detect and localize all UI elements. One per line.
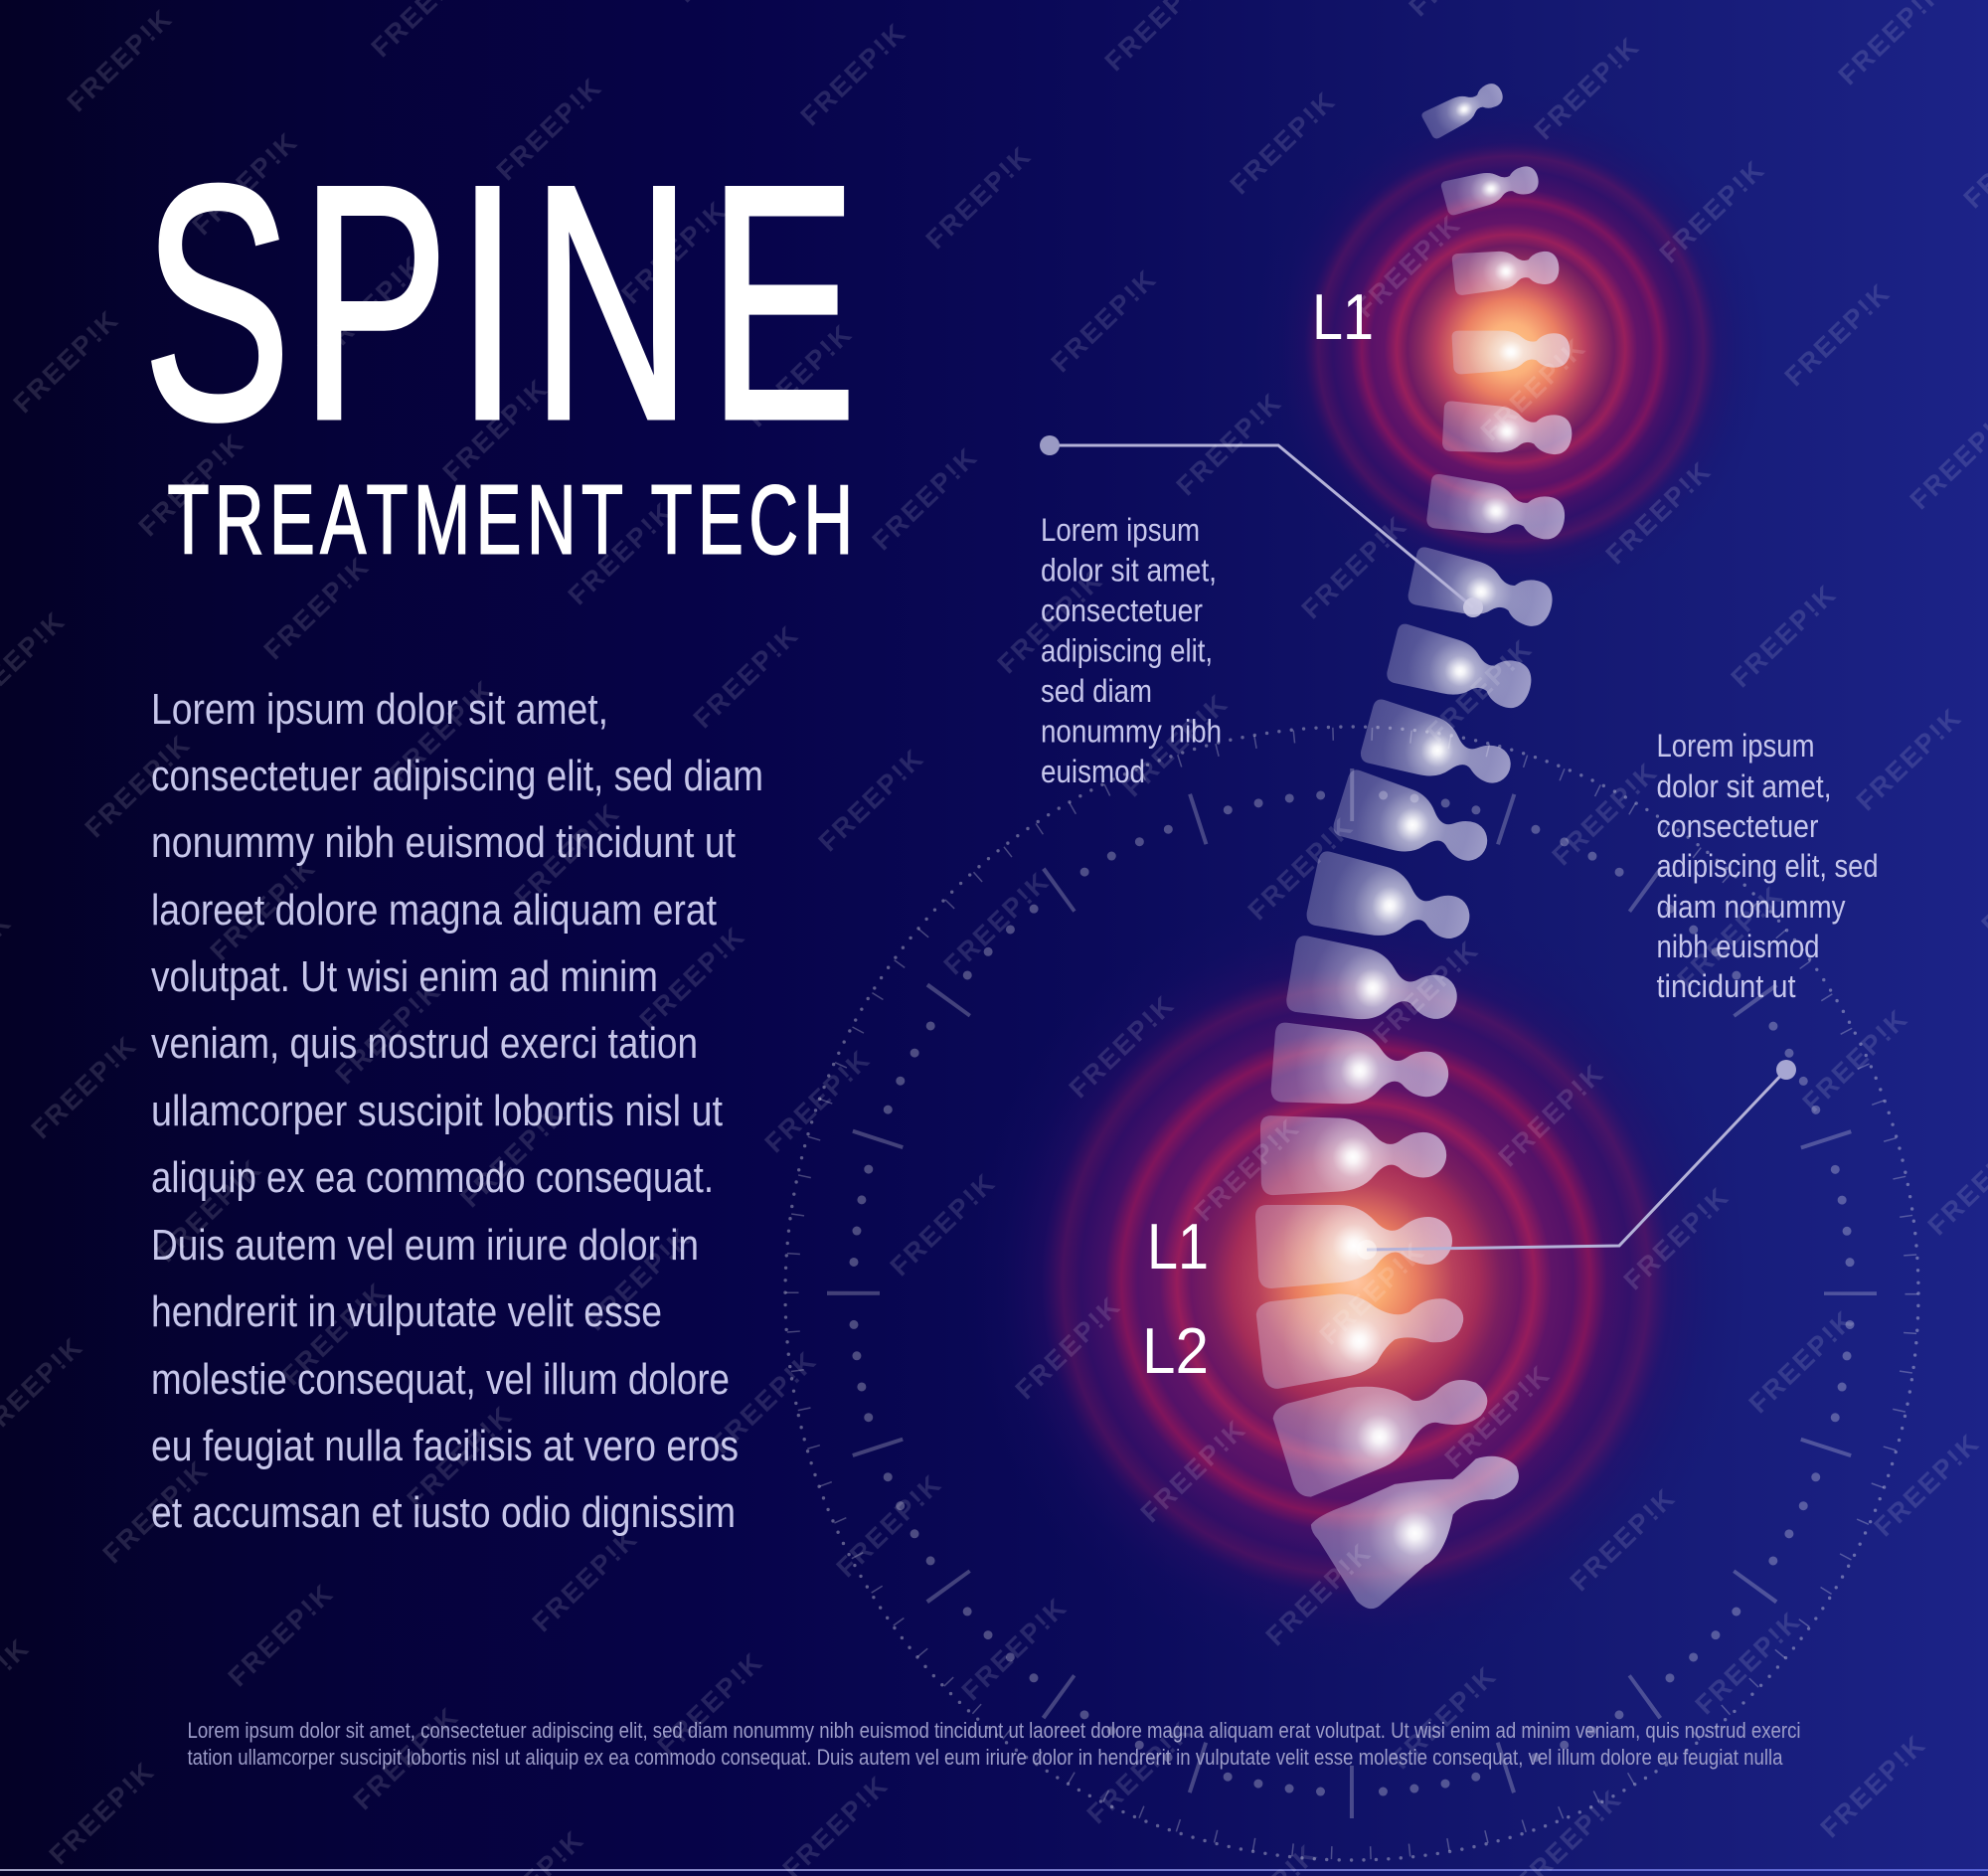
watermarks: FREEP!K: [312, 250, 429, 364]
main paragraph: et accumsan et iusto odio dignissim: [151, 1489, 736, 1537]
watermarks: FREEP!K: [1690, 1606, 1807, 1720]
watermarks: FREEP!K: [26, 1030, 143, 1144]
main paragraph: hendrerit in vulputate velit esse: [151, 1288, 662, 1336]
watermarks: FREEP!K: [1475, 332, 1592, 446]
watermarks: FREEP!K: [1242, 811, 1360, 926]
watermarks: FREEP!K: [813, 743, 930, 857]
watermarks: FREEP!K: [151, 1153, 268, 1268]
vertebra labels: [1142, 280, 1374, 1387]
watermarks: FREEP!K: [616, 195, 734, 309]
watermarks: FREEP!K: [44, 1756, 161, 1870]
watermarks: FREEP!K: [688, 619, 805, 734]
watermarks: FREEP!K: [742, 318, 859, 432]
watermarks: FREEP!K: [885, 1167, 1002, 1281]
watermarks: FREEP!K: [1618, 1181, 1736, 1295]
main paragraph: ullamcorper suscipit lobortis nisl ut: [151, 1088, 723, 1135]
main paragraph: aliquip ex ea commodo consequat.: [151, 1154, 714, 1202]
watermarks: FREEP!K: [187, 126, 304, 241]
watermarks: FREEP!K: [1493, 1058, 1610, 1172]
vertebra 7: [1404, 546, 1558, 639]
callout text: upper left: Lorem ipsum: [1041, 512, 1200, 548]
watermarks: FREEP!K: [1260, 1537, 1378, 1651]
main paragraph: [151, 686, 763, 1537]
title: SPINE: SPINE: [143, 116, 856, 489]
watermarks: FREEP!K: [1046, 263, 1163, 378]
vertebra 5: [1439, 401, 1574, 463]
callout text: right: diam nonummy: [1656, 889, 1845, 925]
watermarks: FREEP!K: [920, 140, 1038, 255]
watermarks: FREEP!K: [652, 1646, 769, 1761]
watermarks: FREEP!K: [1797, 1003, 1914, 1117]
main paragraph: consectetuer adipiscing elit, sed diam: [151, 753, 763, 800]
watermarks: FREEP!K: [276, 1277, 394, 1391]
watermarks: FREEP!K: [509, 797, 626, 912]
main paragraph: eu feugiat nulla facilisis at vero eros: [151, 1423, 739, 1470]
dial fine ticks: [792, 734, 1911, 1853]
watermarks: FREEP!K: [1010, 1290, 1127, 1405]
vertebra 11: [1302, 849, 1477, 963]
dial outer dotted ring: [785, 727, 1918, 1860]
watermarks: FREEP!K: [8, 304, 125, 419]
vertebra 3: [1452, 249, 1561, 295]
callout text: right: nibh euismod: [1656, 929, 1819, 964]
label: upper L1: L1: [1312, 280, 1374, 353]
watermarks: FREEP!K: [1296, 510, 1413, 624]
watermarks: FREEP!K: [258, 551, 376, 665]
callout text: right: consectetuer: [1656, 808, 1819, 844]
callout text: right: tincidunt ut: [1656, 968, 1796, 1004]
callout connector: upper left: [1040, 435, 1483, 617]
watermarks: FREEP!K: [867, 441, 984, 556]
callout text: right: Lorem ipsum: [1656, 728, 1815, 764]
watermarks: FREEP!K: [1421, 633, 1539, 748]
vertebra 18: [1311, 1456, 1519, 1609]
watermarks: FREEP!K: [348, 1701, 465, 1815]
vertebra 2: [1440, 162, 1542, 217]
watermarks: FREEP!K: [1779, 277, 1897, 392]
watermarks: FREEP!K: [759, 1044, 877, 1158]
main paragraph: Lorem ipsum dolor sit amet,: [151, 686, 608, 734]
vertebra 12: [1281, 934, 1463, 1044]
watermarks: FREEP!K: [1439, 1359, 1557, 1473]
watermarks: FREEP!K: [384, 674, 501, 788]
watermarks: FREEP!K: [527, 1523, 644, 1637]
vertebra 6: [1423, 473, 1569, 551]
watermarks: FREEP!K: [1368, 935, 1485, 1049]
glow: lower pain rings: [963, 889, 1748, 1674]
main paragraph: nonummy nibh euismod tincidunt ut: [151, 819, 736, 867]
watermarks: FREEP!K: [491, 72, 608, 186]
callout text: upper left: consectetuer: [1041, 593, 1203, 628]
watermarks: FREEP!K: [205, 852, 322, 966]
watermarks: FREEP!K: [1135, 1414, 1252, 1528]
watermarks: FREEP!K: [706, 1345, 823, 1459]
watermarks: FREEP!K: [1081, 1715, 1199, 1829]
vertebra 4: [1452, 331, 1570, 374]
watermarks: FREEP!K: [97, 1454, 215, 1569]
callout text: upper left: adipiscing elit,: [1041, 632, 1213, 668]
watermarks: FREEP!K: [80, 729, 197, 843]
bottom rule: [0, 1869, 1988, 1871]
watermarks: FREEP!K: [1743, 1304, 1861, 1419]
watermarks: FREEP!K: [1600, 455, 1718, 570]
watermarks: FREEP!K: [1064, 989, 1181, 1104]
watermarks: FREEP!K: [223, 1578, 340, 1692]
watermarks: FREEP!K: [956, 1592, 1074, 1706]
subtitle: TREATMENT TECH: [167, 464, 853, 574]
watermarks: FREEP!K: [580, 1222, 698, 1336]
watermarks: FREEP!K: [1654, 154, 1771, 268]
label: L2: L2: [1142, 1314, 1209, 1387]
spine: [1255, 79, 1574, 1609]
watermarks: FREEP!K: [1117, 688, 1235, 802]
watermarks: FREEP!K: [62, 3, 179, 117]
watermarks: FREEP!K: [402, 1400, 519, 1514]
vertebra 9: [1356, 697, 1518, 805]
watermarks: FREEP!K: [455, 1099, 573, 1213]
label: lower L1: L1: [1147, 1210, 1209, 1282]
callout connector: lower right: [1357, 1060, 1796, 1260]
watermarks: FREEP!K: [938, 866, 1056, 980]
watermarks: FREEP!K: [1869, 1428, 1986, 1542]
main paragraph: volutpat. Ut wisi enim ad minim: [151, 953, 658, 1001]
watermarks: FREEP!K: [831, 1468, 948, 1583]
vertebra 14: [1258, 1115, 1447, 1201]
watermarks: FREEP!K: [634, 921, 751, 1035]
watermarks: FREEP!K: [1314, 1236, 1431, 1350]
watermarks: FREEP!K: [1672, 880, 1789, 994]
vertebra 8: [1383, 622, 1538, 722]
callout text: upper left: [1041, 512, 1222, 789]
watermarks: FREEP!K: [133, 427, 250, 542]
watermarks: FREEP!K: [330, 975, 447, 1090]
callout text: upper left: nonummy nibh: [1041, 714, 1222, 750]
watermarks: FREEP!K: [1565, 1482, 1682, 1597]
dial major ticks: [853, 795, 1851, 1791]
vertebra 15 (L1): [1255, 1205, 1452, 1288]
vertebra 13: [1267, 1021, 1452, 1121]
main paragraph: Duis autem vel eum iriure dolor in: [151, 1222, 699, 1270]
radial dial: [785, 727, 1918, 1860]
watermarks: FREEP!K: [437, 373, 555, 487]
footer text: [187, 1718, 1801, 1770]
watermarks: FREEP!K: [1350, 209, 1467, 323]
callout text: right: adipiscing elit, sed: [1656, 848, 1879, 884]
watermarks: FREEP!K: [1726, 579, 1843, 693]
watermarks: FREEP!K: [795, 17, 912, 131]
watermarks: FREEP!K: [1851, 702, 1968, 816]
callout text: upper left: dolor sit amet,: [1041, 553, 1217, 589]
vertebra 1: [1420, 79, 1508, 141]
callout text: upper left: euismod: [1041, 754, 1145, 789]
glow: upper pain rings: [1252, 90, 1769, 607]
vertebra 10: [1328, 767, 1496, 885]
callout text: upper left: sed diam: [1041, 673, 1152, 709]
vertebra 17: [1273, 1380, 1487, 1497]
callout text: right: dolor sit amet,: [1656, 768, 1831, 804]
main paragraph: veniam, quis nostrud exerci tation: [151, 1020, 698, 1068]
vertebra 16 (L2): [1256, 1294, 1463, 1389]
watermarks: FREEP!K: [1815, 1729, 1932, 1843]
watermarks: FREEP!K: [1225, 85, 1342, 200]
watermarks: FREEP!K: [1529, 31, 1646, 145]
watermarks: FREEP!K: [1189, 1112, 1306, 1227]
main paragraph: molestie consequat, vel illum dolore: [151, 1356, 730, 1404]
watermarks: FREEP!K: [1386, 1660, 1503, 1775]
main paragraph: laoreet dolore magna aliquam erat: [151, 887, 717, 935]
watermarks: FREEP!K: [992, 565, 1109, 679]
watermarks: FREEP!K: [563, 496, 680, 610]
dial inner dots: [853, 794, 1851, 1792]
watermarks: FREEP!K: [1171, 387, 1288, 501]
watermarks: FREEP!K: [1547, 757, 1664, 871]
callout text: right: [1656, 728, 1879, 1004]
